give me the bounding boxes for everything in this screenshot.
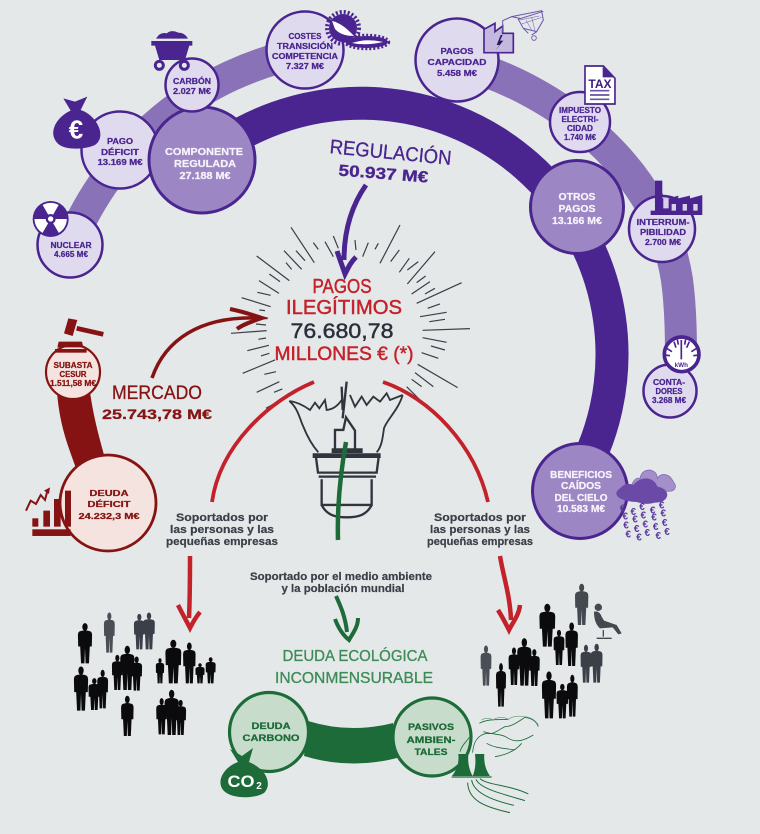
circle: interrumpibilidad: INTERRUM-	[636, 218, 690, 227]
circle: pagos capacidad: PAGOS	[440, 47, 474, 56]
circle: contadores: 3.268 M€	[652, 396, 687, 405]
circle: impuesto electricidad: 1.740 M€	[564, 133, 597, 142]
circle: contadores: DORES	[656, 387, 683, 396]
circle: costes transicion competencia: COMPETENCIA	[272, 52, 338, 61]
circle: carbon: CARBÓN	[173, 77, 211, 86]
circle: otros pagos	[530, 160, 624, 254]
circle: beneficios caidos del cielo: CAÍDOS	[561, 479, 601, 492]
circle: componente regulada	[149, 107, 255, 213]
title: pagos ilegitimos: 76.680,78	[290, 320, 394, 343]
circle: pagos capacidad	[416, 18, 498, 102]
amount: regulacion: 50.937 M€	[338, 163, 429, 187]
circle: impuesto electricidad	[550, 92, 610, 152]
text: soportados left: Soportados por	[176, 512, 269, 524]
circle: otros pagos: OTROS	[558, 192, 596, 203]
circle: nuclear: NUCLEAR	[50, 241, 92, 250]
icon: cloud raining euros: €	[631, 507, 637, 518]
circle: deuda deficit: 24.232,3 M€	[78, 512, 140, 521]
people group right	[481, 584, 622, 718]
icon: kWh meter	[664, 337, 699, 372]
circle: interrumpibilidad	[629, 196, 695, 262]
arrow: red left	[178, 556, 200, 628]
circle: costes transicion competencia: COSTES	[288, 32, 322, 41]
arrow: red right	[498, 556, 520, 630]
icon: kWh meter: kWh	[675, 362, 688, 369]
circle: costes transicion competencia: 7.327 M€	[286, 62, 325, 71]
circle: deuda carbono	[230, 692, 308, 772]
circle: subasta cesur: SUBASTA	[54, 361, 93, 370]
icon: light bulb	[289, 382, 403, 517]
text: soportados right: las personas y las	[430, 524, 530, 536]
circle: beneficios caidos del cielo: BENEFICIOS	[550, 470, 612, 481]
arrow: regulation to bulb	[337, 185, 366, 274]
circle: beneficios caidos del cielo: DEL CIELO	[554, 493, 608, 504]
icon: rising bar chart	[26, 487, 71, 536]
icon: gavel	[55, 318, 103, 353]
text: soportados right	[427, 512, 533, 548]
icon: cloud raining euros: €	[623, 521, 629, 532]
icon: tax document	[585, 66, 615, 104]
circle: otros pagos: 13.166 M€	[552, 216, 602, 227]
circle: pago deficit	[82, 112, 158, 188]
icon: co2 bag: CO	[228, 772, 254, 791]
icon: cloud raining euros: €	[636, 533, 642, 544]
icon: cloud raining euros: €	[661, 509, 667, 520]
icon: power plant and pylon	[484, 11, 543, 53]
heading: deuda ecologica: INCONMENSURABLE	[275, 670, 433, 687]
circle: componente regulada: COMPONENTE	[165, 147, 243, 158]
circle: deuda deficit: DÉFICIT	[88, 500, 131, 509]
icon: cloud raining euros: €	[620, 503, 626, 514]
circle: interrumpibilidad: 2.700 M€	[645, 238, 682, 247]
circle: beneficios caidos del cielo	[532, 444, 628, 538]
circle: pago deficit: DÉFICIT	[101, 148, 139, 157]
circle: interrumpibilidad: PIBILIDAD	[640, 228, 686, 237]
circle: componente regulada: 27.188 M€	[180, 171, 231, 182]
circle: subasta cesur: 1.511,58 M€	[50, 379, 97, 388]
icon: cloud raining euros: €	[656, 531, 662, 542]
icon: cloud raining euros: €	[639, 502, 645, 513]
title: pagos ilegitimos: MILLONES € (*)	[274, 344, 414, 365]
icon: coal cart	[151, 31, 192, 69]
circle: componente regulada: REGULADA	[174, 159, 236, 170]
icon: radiation	[33, 201, 69, 237]
outer arc: right branch	[457, 62, 681, 365]
icon: cloud raining euros: €	[623, 511, 629, 522]
icon: money bag: €	[69, 114, 83, 144]
text: soportados left: las personas y las	[170, 524, 274, 536]
band: market link	[57, 392, 106, 474]
icon: money bag	[53, 97, 100, 149]
circle: subasta cesur	[46, 345, 100, 399]
arrow: market to bulb	[152, 309, 262, 378]
text: soportados right: Soportados por	[434, 512, 527, 524]
heading: deuda ecologica	[275, 646, 433, 687]
circle: impuesto electricidad: CIDAD	[567, 124, 593, 133]
icon: cloud raining euros	[616, 470, 675, 544]
circle: pasivos ambientales: AMBIEN-	[406, 735, 456, 746]
people group left	[74, 612, 216, 736]
icon: co2 bag: 2	[256, 781, 262, 792]
title: pagos ilegitimos	[274, 276, 414, 365]
circle: otros pagos: PAGOS	[558, 204, 596, 215]
text: soportado medio ambiente: y la población mundial	[282, 583, 404, 595]
icon: cloud raining euros: €	[641, 510, 647, 521]
icon: cloud raining euros: €	[643, 519, 649, 530]
icon: cloud raining euros: €	[664, 527, 670, 538]
icon: cloud raining euros: €	[659, 501, 665, 512]
band: green link	[304, 721, 397, 764]
icon: cloud raining euros: €	[653, 522, 659, 533]
icon: factory	[651, 181, 702, 215]
circle: deuda deficit	[60, 455, 156, 551]
title: pagos ilegitimos: PAGOS	[312, 276, 372, 298]
icon: cloud raining euros: €	[626, 530, 632, 541]
icon: tax document: TAX	[588, 77, 612, 91]
heading: mercado: MERCADO	[112, 383, 202, 404]
icon: cloud raining euros: €	[645, 528, 651, 539]
icon: cloud raining euros: €	[662, 518, 668, 529]
icon: cloud raining euros: €	[632, 515, 638, 526]
circle: contadores: CONTA-	[653, 378, 685, 387]
circle: impuesto electricidad: ELECTRI-	[562, 115, 599, 124]
icon: gears	[327, 12, 389, 49]
circle: deuda carbono: DEUDA	[252, 721, 291, 732]
circle: nuclear: 4.665 M€	[54, 250, 89, 259]
circle: carbon: 2.027 M€	[173, 87, 212, 96]
circle: nuclear	[38, 212, 102, 278]
arrow: green	[335, 596, 358, 640]
circle: pasivos ambientales: TALES	[414, 747, 448, 758]
circle: subasta cesur: CESUR	[60, 370, 87, 379]
circle: pasivos ambientales	[393, 698, 471, 776]
circle: pago deficit: 13.169 M€	[98, 158, 143, 167]
circle: deuda deficit: DEUDA	[90, 489, 129, 498]
main regulation arc	[202, 103, 612, 487]
circle: costes transicion competencia	[266, 12, 344, 88]
icon: co2 bag	[220, 748, 268, 797]
curve: red right	[383, 382, 488, 502]
heading: deuda ecologica: DEUDA ECOLÓGICA	[282, 646, 428, 665]
circle: deuda carbono: CARBONO	[242, 733, 300, 744]
amount: mercado: 25.743,78 M€	[102, 406, 212, 422]
icon: cloud raining euros: €	[634, 524, 640, 535]
circle: carbon	[166, 58, 218, 112]
text: soportado medio ambiente	[250, 571, 432, 595]
circle: beneficios caidos del cielo: 10.583 M€	[557, 504, 605, 515]
circle: costes transicion competencia: TRANSICIÓN	[277, 42, 333, 51]
heading: regulacion: REGULACIÓN	[329, 135, 452, 170]
icon: cloud raining euros: €	[651, 513, 657, 524]
circle: contadores	[644, 364, 696, 418]
circle: pago deficit: PAGO	[107, 137, 133, 146]
light rays	[231, 225, 470, 408]
outer arc: left branch	[70, 52, 305, 245]
circle: impuesto electricidad: IMPUESTO	[559, 106, 601, 115]
circle: pasivos ambientales: PASIVOS	[408, 722, 454, 733]
title: pagos ilegitimos: ILEGÍTIMOS	[286, 296, 402, 319]
icon: cloud raining euros: €	[650, 505, 656, 516]
curve: red left	[212, 382, 314, 502]
icon: cooling towers, smoke and rivers	[452, 716, 538, 813]
circle: pagos capacidad: CAPACIDAD	[428, 58, 487, 67]
text: soportados right: pequeñas empresas	[427, 536, 533, 548]
text: soportados left: pequeñas empresas	[166, 536, 278, 548]
text: soportado medio ambiente: Soportado por el medio ambiente	[250, 571, 432, 583]
circle: pagos capacidad: 5.458 M€	[437, 69, 478, 78]
line: green through bulb	[338, 442, 346, 540]
text: soportados left	[166, 512, 278, 548]
